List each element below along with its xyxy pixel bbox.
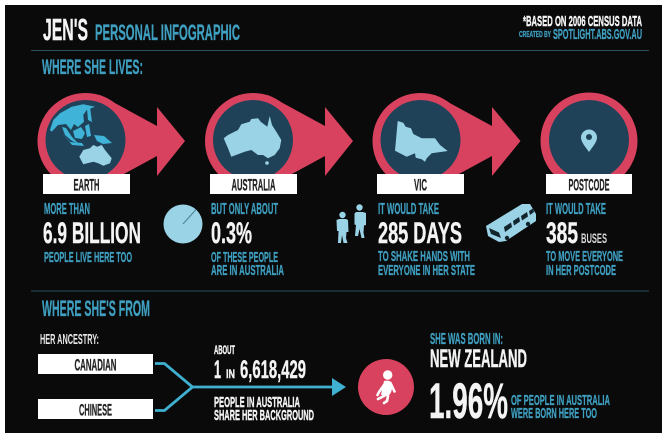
text block: 1 in 6,618,429 [214,343,314,424]
panel: postcode marker [540,92,638,194]
label: earth: EARTH [74,176,100,194]
text block: australia stat: ARE IN AUSTRALIA [211,262,284,279]
arrow: ancestry connector [155,364,346,410]
label: chinese: CHINESE [79,400,112,420]
text block: earth stat: MORE THAN [44,201,90,218]
text block: earth stat [43,201,141,266]
text block: born in [430,331,527,373]
text block: postcode stat: 385 [546,217,578,250]
text block: 1 in 6,618,429: IN [226,367,235,381]
text block: 1.96% stat: 1.96% [429,373,508,429]
label: earth [43,174,130,194]
text block: born in: NEW ZEALAND [430,345,527,373]
text block: 1 in 6,618,429: ABOUT [214,343,235,357]
label: australia: AUSTRALIA [232,176,276,194]
chart: pie 0.3% [164,204,202,244]
text: WHERE SHE'S FROM [42,296,150,321]
label: australia [210,174,297,194]
text block: born in: SHE WAS BORN IN: [430,331,503,348]
source note [519,13,642,43]
text block: australia stat [211,201,284,279]
icon: two people [336,204,366,243]
title: JEN'S [43,12,88,47]
icon: globe landmasses [50,104,112,166]
panel: vic marker [372,93,520,194]
text block: vic stat: 285 DAYS [378,217,462,250]
text block: 1 in 6,618,429: PEOPLE IN AUSTRALIA [214,394,300,411]
label: canadian: CANADIAN [74,356,116,374]
text: SHARE HER BACKGROUND [214,407,314,424]
text block: earth stat: 6.9 BILLION [43,217,141,250]
text block: vic stat [378,201,475,279]
text block: australia stat: OF THESE PEOPLE [211,249,278,266]
text: HER ANCESTRY: [40,331,99,348]
text block: earth stat: PEOPLE LIVE HERE TOO [44,249,132,266]
label: vic: VIC [414,176,427,194]
heading: where she lives: WHERE SHE LIVES: [42,56,143,79]
icon: victoria map [395,121,448,162]
label: canadian [38,354,153,374]
text block: australia stat: 0.3% [211,217,252,250]
label: chinese [38,399,153,420]
label: postcode: POSTCODE [568,176,610,194]
icon: baby [358,359,414,415]
title [43,12,240,47]
text block: postcode stat: BUSES [581,230,607,246]
text block: vic stat: EVERYONE IN HER STATE [378,262,475,279]
title: PERSONAL INFOGRAPHIC [95,20,240,45]
text block: 1 in 6,618,429: 6,618,429 [240,356,306,384]
text block: australia stat: BUT ONLY ABOUT [211,201,278,218]
text block: 1 in 6,618,429: 1 [214,356,221,384]
icon: map pin [581,130,597,152]
label: vic [377,174,464,194]
text block: vic stat: TO SHAKE HANDS WITH [378,248,470,265]
icon: australia map [224,116,281,165]
icon: bus [486,204,536,242]
text block: vic stat: IT WOULD TAKE [378,201,439,218]
panel: australia marker [205,93,353,194]
source note: CREATED BY [519,30,551,39]
text block: postcode stat [546,201,623,279]
panel: earth marker [38,93,185,194]
